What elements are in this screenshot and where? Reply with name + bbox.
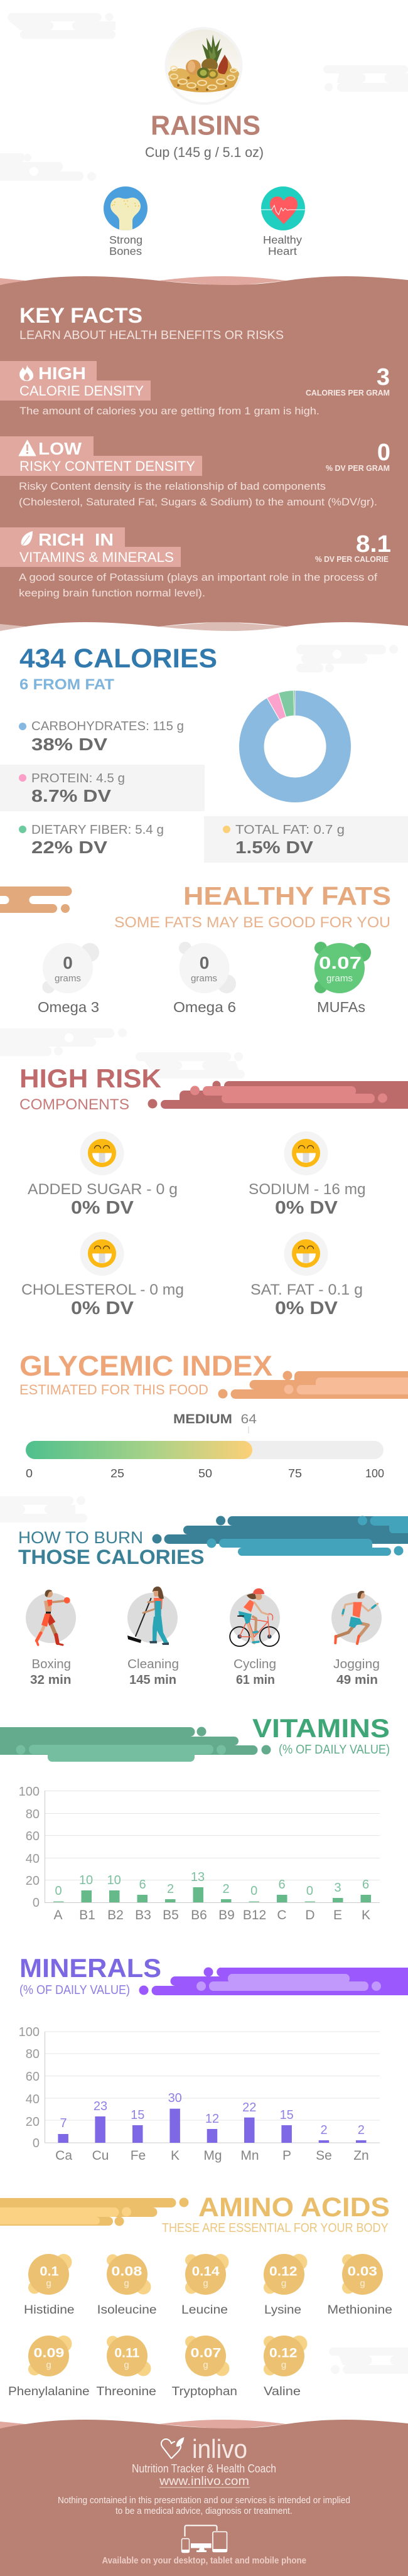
bar chart: vitamins: 2	[222, 1882, 230, 1896]
bar chart: vitamins: B9	[218, 1908, 235, 1922]
legend: dietary fiber	[19, 823, 164, 857]
bar chart: minerals: 22	[242, 2101, 256, 2115]
fact: rich in vitamins and minerals: RICH IN	[38, 530, 114, 549]
bar chart: minerals: 20	[26, 2115, 40, 2129]
bar chart: vitamins: E	[333, 1908, 342, 1922]
amino acid: leucine: 0.14	[192, 2264, 220, 2278]
fact: high calorie density: CALORIES PER GRAM	[306, 389, 390, 397]
label: healthy heart	[263, 234, 302, 257]
title: RAISINS	[151, 110, 260, 141]
amino acid: tryptophan: 0.07	[191, 2346, 221, 2360]
icon: grinning face	[284, 1131, 328, 1175]
bar chart: vitamins: 0	[306, 1884, 313, 1898]
legend: protein	[0, 765, 205, 811]
fat bubble: omega 3: Omega 3	[38, 999, 99, 1015]
bar chart: vitamins: B1	[79, 1908, 95, 1922]
bar chart: minerals: 2	[358, 2123, 365, 2137]
amino acid: tryptophan: g	[203, 2359, 208, 2371]
bar chart: vitamins: B6	[191, 1908, 207, 1922]
heading: glycemic index: GLYCEMIC INDEX	[19, 1350, 272, 1382]
food photo: dried fruit in circle	[164, 27, 242, 105]
risk item: added sugar	[28, 1131, 178, 1218]
legend: total fat: 1.5% DV	[235, 838, 313, 857]
label: strong bones	[109, 234, 142, 257]
bar chart: minerals: Mg	[203, 2148, 222, 2163]
label: healthy heart: Healthy	[263, 234, 302, 246]
legend: carbohydrates: CARBOHYDRATES: 115 g	[31, 719, 184, 733]
amino acid: lysine: Lysine	[264, 2304, 301, 2317]
amino acid: valine: 0.12	[269, 2346, 298, 2360]
fat bubble: mufas	[314, 942, 371, 1015]
bar chart: vitamins: 6	[278, 1878, 286, 1892]
subheading: from fat: 6 FROM FAT	[19, 676, 114, 693]
bar chart: vitamins: 10	[79, 1873, 93, 1887]
bar chart: minerals: Ca	[55, 2148, 72, 2163]
fact: rich in vitamins and minerals	[0, 527, 391, 599]
bar chart: minerals: 40	[26, 2093, 40, 2106]
legend: protein: PROTEIN: 4.5 g	[31, 772, 125, 785]
subheading: LEARN ABOUT HEALTH BENEFITS OR RISKS	[19, 328, 284, 342]
disclaimer	[58, 2496, 350, 2516]
bar chart: minerals: 15	[131, 2108, 144, 2122]
icon: grinning face	[284, 1232, 328, 1276]
risk item: saturated fat	[250, 1232, 363, 1318]
fact: low risky content density: (Cholesterol, Saturated Fat, Sugars & Sodium) to the amount (%DV/gr).	[19, 496, 377, 508]
bar chart: minerals: Se	[316, 2148, 332, 2163]
bar chart: vitamins: 3	[334, 1881, 341, 1895]
amino acid: methionine: g	[360, 2278, 365, 2289]
amino acid: tryptophan: Tryptophan	[172, 2385, 237, 2398]
bar chart: vitamins: 13	[191, 1870, 205, 1884]
bar chart: vitamins: B3	[135, 1908, 151, 1922]
fact: low risky content density	[0, 436, 390, 508]
fact: low risky content density: LOW	[38, 439, 82, 458]
activity: cycling: Cycling	[234, 1657, 276, 1671]
amino acid: methionine: 0.03	[348, 2264, 377, 2278]
icon: runner	[335, 1591, 378, 1644]
subheading: glycemic index: ESTIMATED FOR THIS FOOD	[19, 1382, 208, 1398]
amino acid: leucine: Leucine	[181, 2304, 228, 2317]
bar chart: minerals: 60	[26, 2070, 40, 2084]
fat bubble: omega 6: grams	[191, 973, 217, 984]
decoration: glycemic index bars	[218, 1371, 408, 1399]
heading: those calories: THOSE CALORIES	[18, 1546, 205, 1568]
risk item: cholesterol: CHOLESTEROL - 0 mg	[21, 1281, 184, 1298]
bar chart: vitamins: 60	[26, 1830, 40, 1843]
subheading: components: COMPONENTS	[19, 1096, 129, 1113]
activity: cycling	[230, 1588, 280, 1687]
heading: amino acids: AMINO ACIDS	[198, 2192, 390, 2223]
disclaimer: Nothing contained in this presentation and our services is intended or implied	[58, 2496, 350, 2506]
amino acid: methionine: Methionine	[328, 2304, 392, 2317]
amino acid: threonine: 0.11	[114, 2346, 140, 2360]
bar chart: minerals: Mn	[240, 2148, 259, 2163]
legend: total fat	[204, 816, 408, 863]
risk item: added sugar: 0% DV	[71, 1198, 134, 1218]
activity: cleaning	[127, 1587, 179, 1687]
legend: dietary fiber: 22% DV	[31, 838, 107, 857]
bar chart: vitamins	[19, 1785, 380, 1922]
availability note: Available on your desktop, tablet and mobile phone	[102, 2555, 306, 2566]
bar chart: minerals: 23	[94, 2099, 107, 2113]
heading: high risk: HIGH RISK	[19, 1064, 161, 1093]
amino acid: valine	[264, 2336, 308, 2398]
bar chart: vitamins: 0	[250, 1884, 257, 1898]
decoration: healthy fats bars	[0, 887, 72, 913]
decoration: minerals bars	[139, 1968, 408, 1995]
fact: rich in vitamins and minerals: keeping brain function normal level).	[19, 587, 205, 599]
bar chart: vitamins: 10	[107, 1873, 121, 1887]
amino acid: leucine	[181, 2254, 228, 2317]
chart: glycemic index gauge: 0	[26, 1467, 33, 1480]
serving size: Cup (145 g / 5.1 oz)	[145, 144, 264, 160]
bar chart: minerals: 0	[33, 2137, 40, 2150]
heading: vitamins: VITAMINS	[252, 1713, 390, 1743]
icon: person sweeping	[127, 1587, 169, 1645]
amino acid: histidine: 0.1	[40, 2264, 59, 2278]
amino acid: isoleucine: Isoleucine	[97, 2304, 157, 2317]
bar chart: minerals: Zn	[353, 2148, 369, 2163]
disclaimer: to be a medical advice, diagnosis or treatment.	[115, 2506, 293, 2516]
amino acid: phenylalanine: 0.09	[34, 2346, 64, 2360]
amino acid: isoleucine: 0.08	[111, 2264, 142, 2278]
logo: inlivo	[161, 2434, 247, 2464]
amino acid: histidine	[24, 2254, 75, 2317]
fat bubble: mufas: grams	[326, 973, 353, 984]
amino acid: valine: g	[281, 2359, 286, 2371]
icon: grinning face	[80, 1232, 124, 1276]
amino acid: isoleucine	[97, 2254, 157, 2317]
chart: glycemic index gauge: 64	[241, 1412, 257, 1426]
activity: jogging: Jogging	[333, 1657, 380, 1671]
legend: protein: 8.7% DV	[31, 786, 111, 806]
bar chart: minerals: 80	[26, 2047, 40, 2061]
icon: flame	[19, 365, 33, 381]
legend: total fat: TOTAL FAT: 0.7 g	[235, 823, 345, 837]
amino acid: phenylalanine: Phenylalanine	[8, 2385, 90, 2398]
fact: rich in vitamins and minerals: VITAMINS & MINERALS	[19, 549, 174, 565]
amino acid: lysine	[264, 2254, 308, 2317]
activity: boxing	[26, 1590, 76, 1687]
amino acid: phenylalanine	[8, 2336, 90, 2398]
bar chart: minerals: 30	[168, 2091, 182, 2105]
amino acid: histidine: Histidine	[24, 2304, 75, 2317]
heading: minerals: MINERALS	[19, 1953, 161, 1983]
icon: warning	[19, 440, 36, 456]
subheading: vitamins: (% OF DAILY VALUE)	[279, 1743, 390, 1757]
label: healthy heart: Heart	[268, 245, 297, 257]
panel: key facts	[0, 276, 408, 631]
subheading: amino acids: THESE ARE ESSENTIAL FOR YOUR BODY	[162, 2221, 389, 2235]
heading: calories: 434 CALORIES	[19, 644, 217, 674]
bar chart: minerals: 12	[205, 2112, 219, 2126]
heading: key facts: KEY FACTS	[19, 304, 142, 328]
fat bubble: omega 6: 0	[200, 953, 209, 973]
bar chart: minerals: 15	[280, 2108, 294, 2122]
fat bubble: mufas: MUFAs	[317, 999, 365, 1015]
amino acid: lysine: 0.12	[269, 2264, 298, 2278]
icon: boxer	[36, 1590, 70, 1645]
bar chart: minerals	[19, 2025, 380, 2163]
activity: cleaning: 145 min	[129, 1673, 176, 1687]
fat bubble: omega 3: grams	[55, 973, 81, 984]
bar chart: minerals: P	[282, 2148, 291, 2163]
decoration: amino acids bars	[0, 2197, 188, 2226]
amino acid: phenylalanine: g	[46, 2359, 51, 2371]
donut chart: macronutrients	[239, 690, 352, 802]
fact: rich in vitamins and minerals: 8.1	[356, 531, 391, 558]
chart: glycemic index gauge: MEDIUM	[173, 1412, 232, 1426]
amino acid: tryptophan	[172, 2336, 237, 2398]
activity: boxing: Boxing	[31, 1657, 71, 1671]
chart: glycemic index gauge: 100	[365, 1467, 384, 1480]
activity: jogging	[331, 1591, 382, 1687]
fact: rich in vitamins and minerals: A good source of Potassium (plays an important role in the process of	[19, 571, 377, 583]
bar chart: vitamins: 80	[26, 1808, 40, 1821]
bar chart: minerals: K	[171, 2148, 180, 2163]
bar chart: vitamins: 40	[26, 1852, 40, 1866]
bar chart: minerals: 2	[320, 2123, 328, 2137]
bar chart: vitamins: B5	[163, 1908, 179, 1922]
bar chart: vitamins: B2	[107, 1908, 124, 1922]
bar chart: vitamins: C	[277, 1908, 287, 1922]
bar chart: minerals: 7	[60, 2116, 67, 2130]
fat bubble: omega 3	[38, 943, 99, 1015]
fact: high calorie density: CALORIE DENSITY	[19, 383, 144, 399]
fact: high calorie density	[0, 361, 390, 417]
fact: low risky content density: RISKY CONTENT DENSITY	[19, 458, 195, 474]
icon: strong bones	[104, 186, 148, 232]
chart: glycemic index gauge: 75	[288, 1467, 302, 1480]
icon: healthy heart	[261, 186, 305, 230]
decoration: high risk bars	[148, 1081, 408, 1109]
risk item: sodium	[249, 1131, 365, 1218]
icon: leaf	[21, 531, 33, 546]
activity: boxing: 32 min	[30, 1673, 72, 1687]
bar chart: vitamins: K	[362, 1908, 370, 1922]
fact: high calorie density: 3	[377, 364, 390, 391]
bar chart: vitamins: D	[305, 1908, 315, 1922]
fact: low risky content density: 0	[377, 439, 390, 466]
amino acid: threonine	[96, 2336, 156, 2398]
risk item: sodium: 0% DV	[275, 1198, 338, 1218]
fat bubble: omega 3: 0	[63, 953, 73, 973]
subheading: SOME FATS MAY BE GOOD FOR YOU	[114, 914, 390, 931]
decoration: vitamins bars	[0, 1727, 271, 1762]
icon: cyclist	[230, 1588, 279, 1646]
bar chart: vitamins: B12	[243, 1908, 266, 1922]
fact: low risky content density: Risky Content density is the relationship of bad components	[19, 480, 326, 492]
amino acid: histidine: g	[46, 2278, 51, 2289]
amino acid: leucine: g	[203, 2278, 208, 2289]
risk item: saturated fat: 0% DV	[275, 1298, 338, 1318]
bar chart: vitamins: 2	[167, 1882, 174, 1896]
website link: www.inlivo.com	[159, 2475, 249, 2488]
fat bubble: mufas: 0.07	[319, 953, 362, 973]
bar chart: minerals: Fe	[131, 2148, 146, 2163]
label: strong bones: Bones	[109, 245, 142, 257]
fact: rich in vitamins and minerals: % DV PER CALORIE	[315, 555, 389, 564]
risk item: saturated fat: SAT. FAT - 0.1 g	[250, 1281, 363, 1298]
logo: inlivo: inlivo	[192, 2434, 247, 2464]
panel: footer	[0, 2420, 408, 2576]
chart: glycemic index gauge: 50	[198, 1467, 212, 1480]
risk item: added sugar: ADDED SUGAR - 0 g	[28, 1181, 178, 1198]
fat bubble: omega 6: Omega 6	[173, 999, 236, 1015]
activity: cleaning: Cleaning	[127, 1657, 179, 1671]
bar chart: vitamins: 20	[26, 1874, 40, 1888]
chart: glycemic index gauge: 25	[110, 1467, 124, 1480]
decoration: burn calories bars	[152, 1516, 408, 1556]
bar chart: vitamins: 0	[33, 1896, 40, 1910]
icon: grinning face	[80, 1131, 124, 1175]
bar chart: vitamins: 100	[19, 1785, 40, 1799]
bar chart: minerals: Cu	[92, 2148, 109, 2163]
amino acid: threonine: Threonine	[96, 2385, 156, 2398]
activity: cycling: 61 min	[236, 1673, 275, 1687]
amino acid: isoleucine: g	[124, 2278, 129, 2289]
risk item: sodium: SODIUM - 16 mg	[249, 1181, 365, 1198]
amino acid: lysine: g	[281, 2278, 286, 2289]
amino acid: valine: Valine	[264, 2385, 301, 2398]
tagline: Nutrition Tracker & Health Coach	[132, 2462, 276, 2475]
fat bubble: omega 6	[173, 942, 236, 1015]
bar chart: vitamins: 6	[362, 1878, 369, 1892]
legend: carbohydrates: 38% DV	[31, 735, 107, 754]
heading: healthy fats: HEALTHY FATS	[183, 881, 391, 910]
fact: high calorie density: The amount of calories you are getting from 1 gram is high.	[19, 405, 319, 417]
subheading: minerals: (% OF DAILY VALUE)	[19, 1983, 130, 1997]
bar chart: minerals: 100	[19, 2025, 40, 2039]
legend: carbohydrates	[19, 719, 184, 754]
amino acid: threonine: g	[124, 2359, 129, 2371]
fact: low risky content density: % DV PER GRAM	[326, 464, 390, 473]
icon: devices	[182, 2525, 227, 2553]
bar chart: vitamins: A	[53, 1908, 63, 1922]
bar chart: vitamins: 6	[139, 1878, 146, 1892]
legend: dietary fiber: DIETARY FIBER: 5.4 g	[31, 823, 164, 837]
label: strong bones: Strong	[109, 234, 142, 246]
risk item: cholesterol	[21, 1232, 184, 1318]
bar chart: vitamins: 0	[55, 1884, 62, 1898]
amino acid: methionine	[328, 2254, 392, 2317]
fact: high calorie density: HIGH	[38, 364, 86, 383]
heading: how to burn: HOW TO BURN	[18, 1528, 143, 1547]
activity: jogging: 49 min	[336, 1673, 378, 1687]
chart: glycemic index gauge	[26, 1412, 384, 1480]
risk item: cholesterol: 0% DV	[71, 1298, 134, 1318]
